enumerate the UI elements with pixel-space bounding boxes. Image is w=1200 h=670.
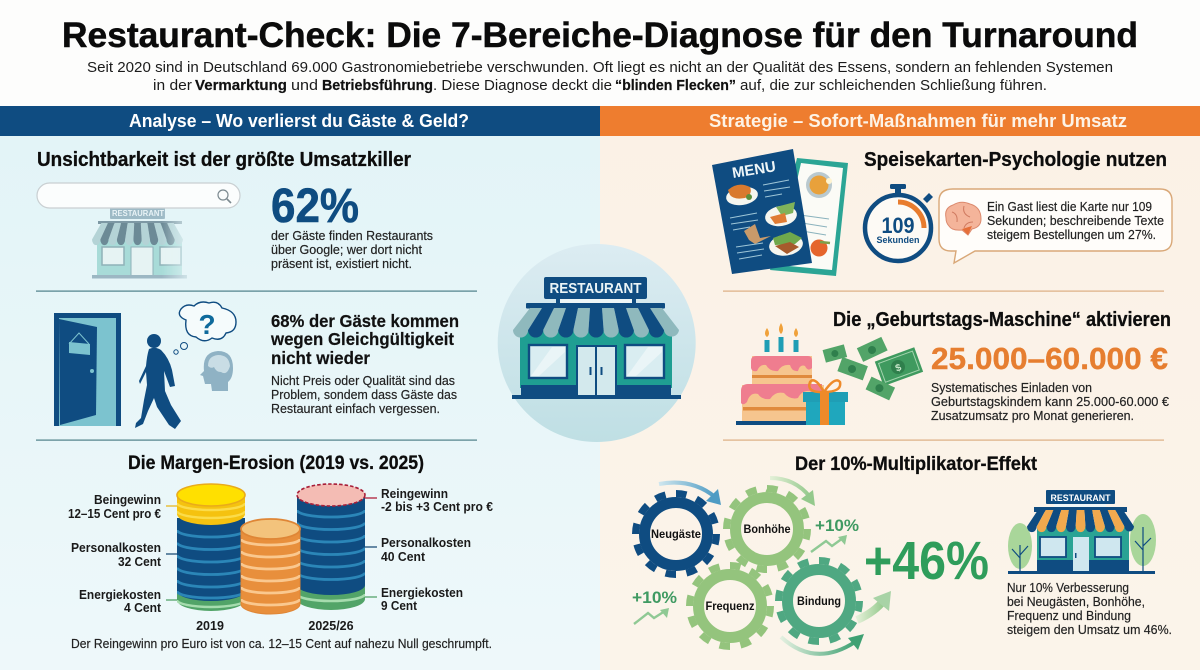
heading: Speisekarten-Psychologie: Speisekarten-Psychologie nutzen <box>864 149 1167 171</box>
text: Gleichgültigkeit: Problem, sondem dass Gäste das <box>271 387 457 402</box>
gear: Frequenz: Frequenz <box>706 599 754 613</box>
title: Restaurant-Check: Die 7-Bereiche-Diagnose für den Turnaround <box>62 16 1138 55</box>
labels left of chart: Energiekosten <box>79 588 161 602</box>
text: Geburtstagskinder: Zusatzumsatz pro Monat generieren. <box>931 408 1134 423</box>
stat: 25.000–60.000 €: 25.000–60.000 € <box>931 341 1168 376</box>
labels right of chart: 9 Cent <box>381 599 418 613</box>
icon: open door <box>54 313 121 426</box>
year labels: 2019 <box>196 619 224 633</box>
icon: walking person <box>135 334 181 429</box>
leader lines <box>166 498 377 600</box>
labels right of chart <box>381 487 493 613</box>
labels left of chart: 12–15 Cent pro € <box>68 507 161 521</box>
heading: 68% der Gäste: 68% der Gäste kommen <box>271 311 459 331</box>
intro text: und <box>291 78 318 94</box>
intro text: Betriebsführung <box>322 78 433 94</box>
gear: Bindung <box>778 560 860 642</box>
icon: menu cards: MENU <box>731 158 777 182</box>
icon: restaurant storefront <box>512 277 681 399</box>
labels left of chart: 32 Cent <box>118 555 162 569</box>
text: Google visibility <box>271 228 433 271</box>
text: Gleichgültigkeit: Restaurant einfach vergessen. <box>271 401 440 416</box>
text: Google visibility: präsent ist, existiert nicht. <box>271 256 412 271</box>
gear: Neugäste <box>636 494 716 574</box>
gear: Bonhöhe <box>726 488 808 570</box>
callout: reading time <box>939 189 1172 263</box>
icon: stopwatch 109 Sekunden <box>865 184 933 261</box>
heading: Unsichtbarkeit: Unsichtbarkeit ist der größte Umsatzkiller <box>37 149 411 171</box>
icon: brain <box>946 202 981 235</box>
right section header <box>600 106 1200 136</box>
coin stack 2019 <box>177 484 245 611</box>
text: 10% Verbesserung: Nur 10% Verbesserung <box>1007 580 1129 595</box>
year labels <box>196 619 354 633</box>
coin stack middle <box>241 519 300 614</box>
labels left of chart: Beingewinn <box>94 493 161 507</box>
text: Gleichgültigkeit: Nicht Preis oder Qualität sind das <box>271 373 455 388</box>
callout: reading time: Sekunden; beschreibende Texte <box>987 213 1164 228</box>
faded restaurant illustration: RESTAURANT <box>112 209 164 218</box>
icon: head with brain <box>200 351 233 391</box>
stat: +46%: +46% <box>864 531 989 591</box>
intro text: auf, die zur schleichenden Schließung führen. <box>740 78 1047 94</box>
gear: Bindung: Bindung <box>797 594 841 608</box>
chart caption: Der Reingewinn pro Euro ist von ca. 12–15 Cent auf nahezu Null geschrumpft. <box>71 636 492 651</box>
search bar <box>37 183 240 208</box>
heading: 10%-Multiplikator: Der 10%-Multiplikator-Effekt <box>795 454 1038 475</box>
heading: 68% der Gäste: wegen Gleichgültigkeit <box>270 329 454 349</box>
growth +10% top: +10% <box>815 516 859 535</box>
icon: stopwatch 109 Sekunden: 109 <box>882 213 914 238</box>
faded restaurant illustration <box>92 206 187 278</box>
heading: Margen-Erosion: Die Margen-Erosion (2019 vs. 2025) <box>128 453 424 474</box>
text: 10% Verbesserung <box>1007 580 1172 637</box>
labels right of chart: Reingewinn <box>381 487 448 501</box>
gear: Neugäste: Neugäste <box>651 527 701 541</box>
labels right of chart: -2 bis +3 Cent pro € <box>381 500 493 514</box>
labels right of chart: 40 Cent <box>381 550 426 564</box>
labels left of chart: Personalkosten <box>71 541 161 555</box>
intro text: “blinden Flecken” <box>615 78 736 94</box>
icon: flying money: $ <box>894 362 903 375</box>
labels left of chart: 4 Cent <box>124 601 162 615</box>
icon: stopwatch 109 Sekunden: Sekunden <box>876 235 920 245</box>
text: Google visibility: der Gäste finden Restaurants <box>271 228 433 243</box>
intro text: Vermarktung <box>195 78 287 94</box>
icon: birthday cake with gift <box>736 323 848 425</box>
curved arrows around gears <box>659 478 891 654</box>
gear: Bonhöhe: Bonhöhe <box>744 522 791 536</box>
intro text: . Diese Diagnose deckt die <box>433 78 612 94</box>
icon: small restaurant with trees <box>1008 490 1156 574</box>
growth +10% left: +10% <box>632 588 677 607</box>
labels left of chart <box>68 493 162 615</box>
right section header: Strategie – Sofort-Maßnahmen für mehr Umsatz <box>709 111 1127 131</box>
icon: flying money <box>823 337 923 400</box>
chart: coin stacks <box>166 484 377 614</box>
heading: Geburtstags-Maschine: Die „Geburtstags-Maschine“ aktivieren <box>833 309 1171 331</box>
central restaurant badge <box>498 244 696 442</box>
gear: Frequenz <box>690 566 770 646</box>
labels right of chart: Personalkosten <box>381 536 471 550</box>
icon: thought cloud with question mark <box>174 302 236 354</box>
growth +10% top <box>811 516 859 552</box>
coin stack 2025/26 <box>297 484 365 610</box>
left section header: Analyse – Wo verlierst du Gäste & Geld? <box>129 111 469 131</box>
callout: reading time: Ein Gast liest die Karte nur 109 <box>987 199 1152 214</box>
text: Geburtstagskinder: Systematisches Einladen von <box>931 380 1092 395</box>
labels right of chart: Energiekosten <box>381 586 463 600</box>
intro text: Seit 2020 sind in Deutschland 69.000 Gastronomiebetriebe verschwunden. Oft liegt es nicht an der Qualität des Essens, sondern an fehlenden Systemen <box>87 60 1113 76</box>
heading: 68% der Gäste: nicht wieder <box>271 348 370 368</box>
text: 10% Verbesserung: bei Neugästen, Bonhöhe, <box>1007 594 1145 609</box>
icon: restaurant storefront: RESTAURANT <box>550 280 642 297</box>
text: 10% Verbesserung: Frequenz und Bindung <box>1007 608 1131 623</box>
callout: reading time: steigem Bestellungen um 27%. <box>987 227 1156 242</box>
icon: small restaurant with trees: RESTAURANT <box>1050 493 1111 504</box>
text: Geburtstagskinder <box>931 380 1170 423</box>
growth +10% left <box>632 588 677 624</box>
icon: magnifier <box>218 190 231 203</box>
text: Gleichgültigkeit <box>271 373 457 416</box>
icon: thought cloud with question mark: ? <box>198 309 216 340</box>
heading: 68% der Gäste <box>270 311 459 368</box>
text: Geburtstagskinder: Geburtstagskindem kann 25.000-60.000 € <box>931 394 1170 409</box>
icon: menu cards <box>712 149 848 276</box>
intro text <box>87 60 1113 94</box>
text: Google visibility: über Google; wer dort nicht <box>271 242 422 257</box>
year labels: 2025/26 <box>308 619 354 633</box>
stat: 62%: 62% <box>271 180 359 233</box>
text: 10% Verbesserung: steigem den Umsatz um 46%. <box>1007 622 1172 637</box>
left section header <box>0 106 600 136</box>
intro text: in der <box>153 78 192 94</box>
